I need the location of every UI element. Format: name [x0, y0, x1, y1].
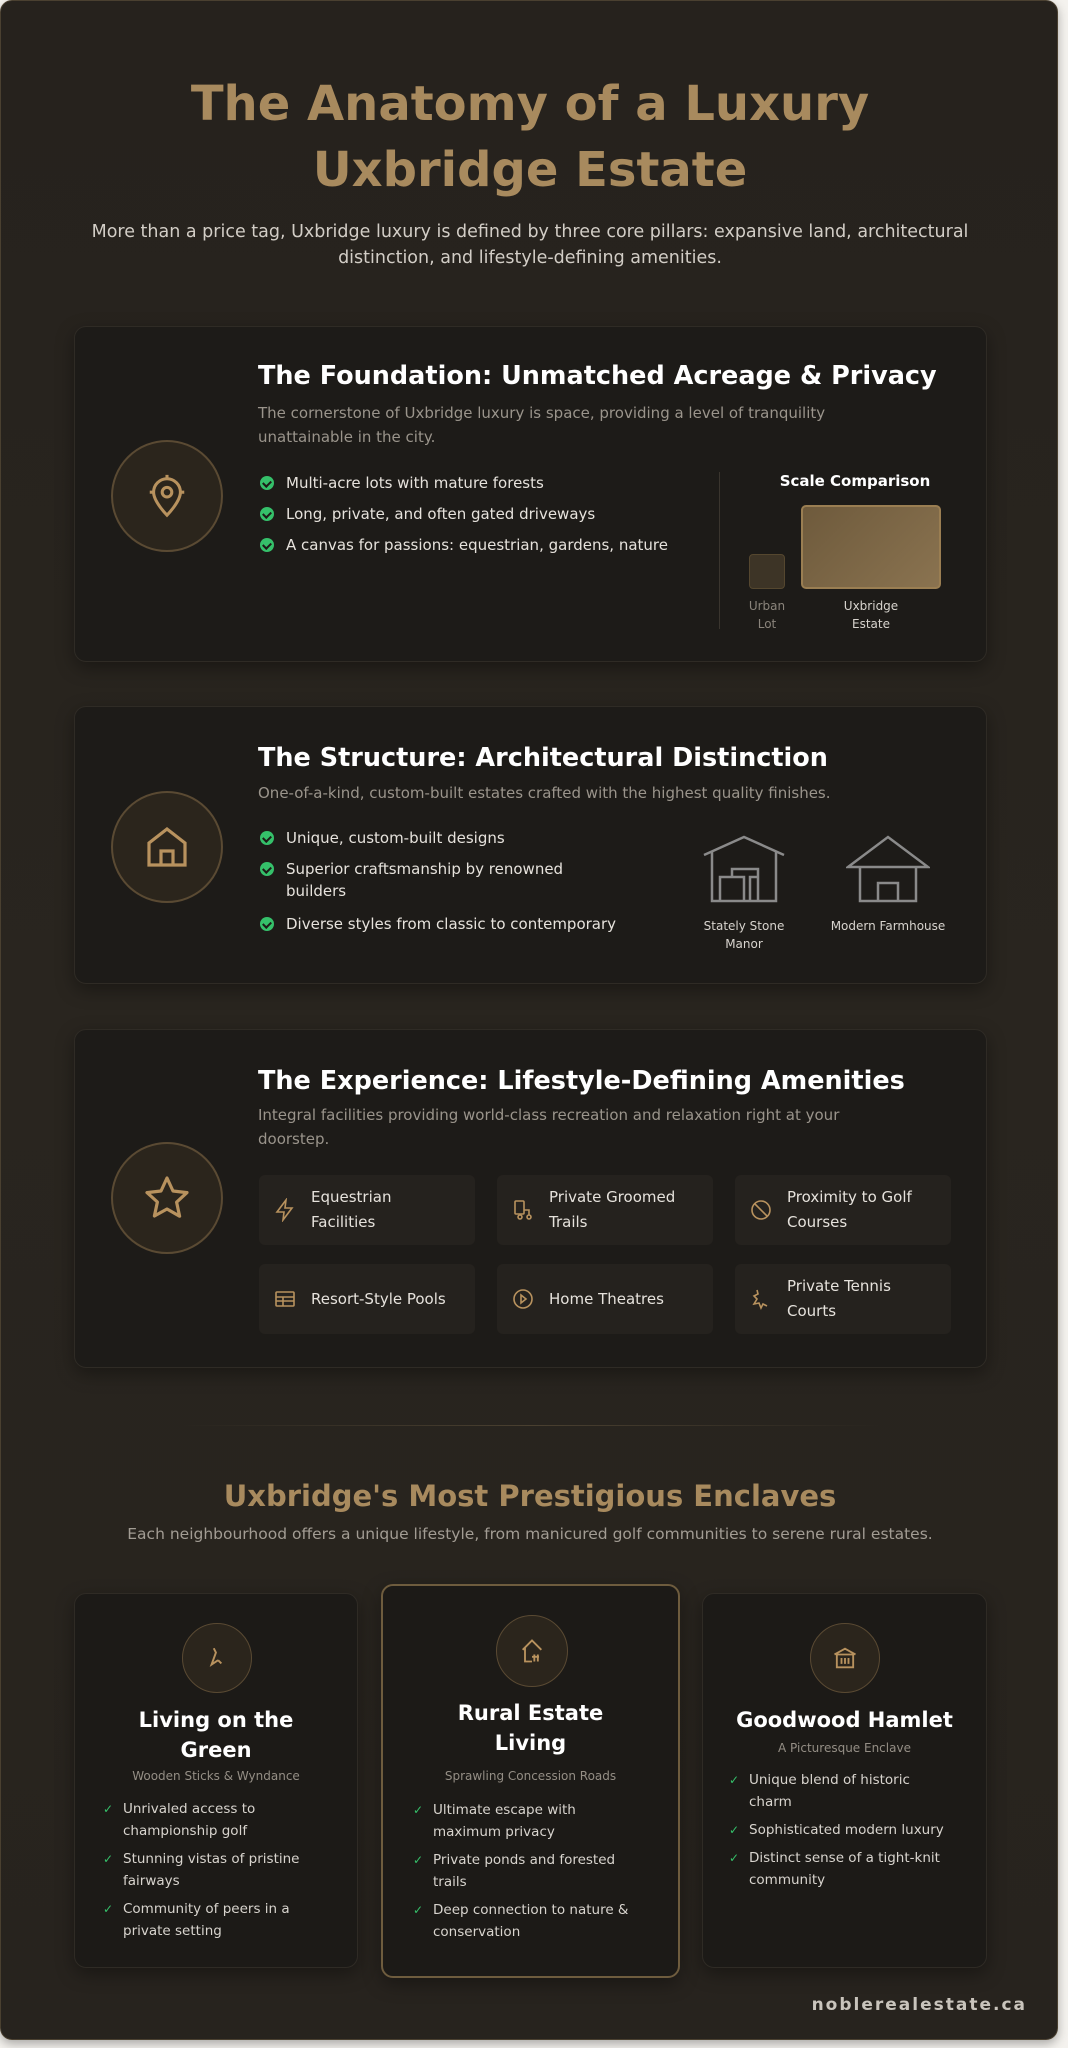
bullet list	[414, 1802, 628, 1940]
bullet list: Deep connection to nature & conservation	[433, 1902, 628, 1940]
bullet list: Community of peers in a private setting	[123, 1901, 290, 1939]
enclave card: living on the green: Green	[180, 1738, 252, 1762]
heading: The Foundation: Unmatched Acreage & Privacy	[258, 361, 937, 391]
icon: rural house	[496, 1615, 568, 1687]
chart: scale comparison: Estate	[852, 617, 890, 631]
description: Integral facilities providing world-class recreation and relaxation right at your doorstep.	[258, 1106, 839, 1148]
bullet list	[730, 1772, 944, 1888]
amenity tile: tennis: Private Tennis	[787, 1277, 891, 1295]
enclave card: living on the green	[74, 1593, 358, 1968]
enclave card: goodwood hamlet: A Picturesque Enclave	[778, 1741, 911, 1755]
icon: stately stone manor: Stately Stone	[704, 919, 784, 933]
chart: scale comparison: Urban	[749, 599, 785, 613]
bullet list: Diverse styles from classic to contemporary	[286, 915, 616, 933]
icon: modern farmhouse: Modern Farmhouse	[831, 919, 945, 933]
footer: website: noblerealestate.ca	[812, 1995, 1027, 2015]
description: The cornerstone of Uxbridge luxury is space, providing a level of tranquility unattainable in the city.	[258, 404, 825, 446]
chart: scale comparison: Uxbridge	[844, 599, 898, 613]
enclave card: living on the green: Living on the	[139, 1708, 293, 1732]
icon: modern farmhouse	[831, 836, 945, 933]
icon: golf	[182, 1623, 252, 1693]
bullet list: Long, private, and often gated driveways	[286, 505, 595, 523]
icon: location	[111, 440, 223, 552]
enclave card: living on the green: Wooden Sticks & Wyndance	[132, 1769, 300, 1783]
title: Uxbridge Estate	[313, 142, 747, 198]
icon: hamlet building	[810, 1623, 880, 1693]
icon: stately stone manor: Manor	[725, 937, 763, 951]
bullet list: Unrivaled access to championship golf	[123, 1801, 255, 1839]
bullet list: Superior craftsmanship by renowned builders	[286, 860, 563, 900]
subtitle: More than a price tag, Uxbridge luxury is defined by three core pillars: expansive land, architectural distinction, and lifestyle-defining amenities.	[92, 222, 968, 268]
chart: scale comparison: Lot	[758, 617, 776, 631]
bullet list: A canvas for passions: equestrian, gardens, nature	[286, 536, 668, 554]
heading: The Structure: Architectural Distinction	[258, 743, 828, 773]
amenity tile: equestrian: Facilities	[311, 1213, 375, 1231]
panel: foundation	[74, 326, 987, 662]
amenity tile: pools	[259, 1264, 475, 1334]
enclave card: rural estate living: Sprawling Concession Roads	[445, 1769, 616, 1783]
amenity tile: equestrian	[259, 1175, 475, 1245]
amenity tile: trails: Trails	[549, 1213, 587, 1231]
chart: scale comparison: Scale Comparison	[780, 472, 930, 490]
amenity tile: theatres: Home Theatres	[549, 1290, 664, 1308]
bullet list: Unique blend of historic charm	[749, 1772, 910, 1810]
amenity tile: trails: Private Groomed	[549, 1188, 675, 1206]
amenity tile: tennis: Courts	[787, 1302, 836, 1320]
chart: scale comparison	[749, 472, 941, 631]
amenity tile: pools: Resort-Style Pools	[311, 1290, 446, 1308]
enclave card: rural estate living: Rural Estate	[458, 1701, 603, 1725]
bullet list: Unique, custom-built designs	[286, 829, 505, 847]
amenity tile: theatres	[497, 1264, 713, 1334]
icon: star	[111, 1142, 223, 1254]
enclave card: rural estate living: Living	[495, 1731, 566, 1755]
section heading: enclaves: Uxbridge's Most Prestigious Enclaves	[224, 1479, 836, 1513]
icon: house	[111, 791, 223, 903]
amenity tile: trails	[497, 1175, 713, 1245]
amenity tile: equestrian: Equestrian	[311, 1188, 391, 1206]
bullet list: Ultimate escape with maximum privacy	[433, 1802, 576, 1840]
bullet list: Distinct sense of a tight-knit community	[749, 1850, 940, 1888]
enclave card: rural estate living	[381, 1584, 680, 1978]
enclave card: goodwood hamlet: Goodwood Hamlet	[736, 1708, 953, 1732]
bullet list: Multi-acre lots with mature forests	[286, 474, 544, 492]
amenity tile: golf: Proximity to Golf	[787, 1188, 912, 1206]
bullet list	[260, 474, 668, 554]
title: The Anatomy of a Luxury	[191, 76, 869, 132]
amenity tile: golf: Courses	[787, 1213, 847, 1231]
bullet list: Stunning vistas of pristine fairways	[123, 1851, 299, 1889]
enclave card: goodwood hamlet	[702, 1593, 987, 1968]
panel: experience	[74, 1029, 987, 1368]
icon: stately stone manor	[704, 836, 784, 951]
amenity tile: tennis	[735, 1264, 951, 1334]
bullet list	[260, 829, 616, 933]
section subtitle: Each neighbourhood offers a unique lifestyle, from manicured golf communities to serene rural estates.	[127, 1525, 933, 1543]
description: One-of-a-kind, custom-built estates crafted with the highest quality finishes.	[258, 784, 831, 802]
heading: The Experience: Lifestyle-Defining Amenities	[258, 1066, 905, 1096]
bullet list: Private ponds and forested trails	[433, 1852, 615, 1890]
amenity tile: golf	[735, 1175, 951, 1245]
bullet list: Sophisticated modern luxury	[749, 1822, 944, 1838]
panel: structure	[74, 706, 987, 984]
bullet list	[104, 1801, 299, 1939]
title	[191, 76, 869, 198]
